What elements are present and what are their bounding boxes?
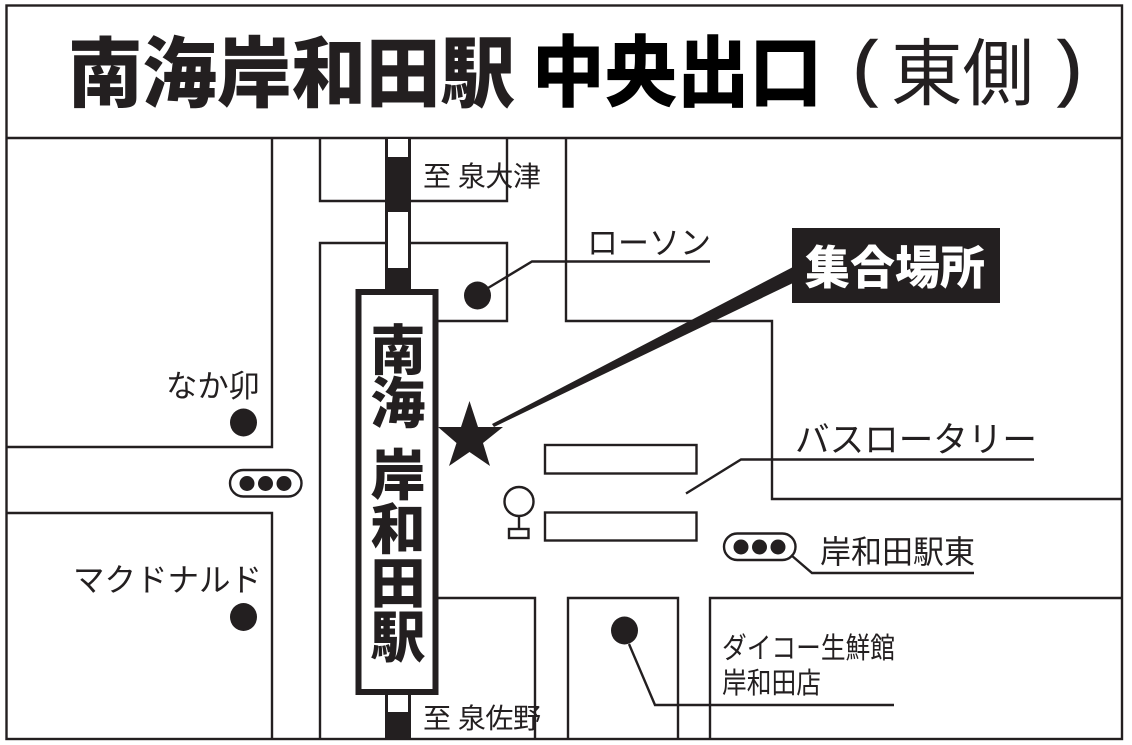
label: bus rotary <box>686 421 1037 494</box>
station name vertical: 南 <box>370 320 426 382</box>
landmark: Daiko fresh foods: 岸和田店 <box>722 668 821 700</box>
station name vertical: 駅 <box>370 607 426 669</box>
landmark: Nakau <box>166 369 260 436</box>
title: central exit: 中央出口 <box>532 29 822 117</box>
station name vertical: 田 <box>370 553 426 615</box>
icon: traffic signal west <box>230 470 302 496</box>
station name vertical <box>370 320 426 669</box>
landmark: McDonald's: マクドナルド <box>73 562 262 598</box>
roads and city blocks <box>6 138 1122 739</box>
icon: traffic signal Kishiwada Station East <box>724 534 796 560</box>
label: to Izumi-Otsu: 至 泉大津 <box>423 161 541 192</box>
title: east side: 東側 <box>891 34 1034 115</box>
meeting point callout <box>492 228 1000 427</box>
title: closing parenthesis: ) <box>1058 28 1082 108</box>
landmark: Nakau: なか卯 <box>166 369 260 404</box>
station name vertical: 和 <box>370 499 426 561</box>
callout label: 集合場所 <box>805 242 985 294</box>
station name vertical: 海 <box>370 373 426 435</box>
landmark: Daiko fresh foods: ダイコー生鮮館 <box>722 632 895 665</box>
label: bus rotary: バスロータリー <box>795 421 1037 460</box>
title <box>68 28 1082 118</box>
icon: meeting point star <box>438 401 503 466</box>
callout label box <box>792 228 1000 303</box>
landmark: McDonald's <box>73 562 262 631</box>
title: station name: 南海岸和田駅 <box>68 32 515 118</box>
label: to Izumi-Sano: 至 泉佐野 <box>423 703 541 734</box>
title: opening parenthesis: ( <box>853 28 877 108</box>
bus rotary islands <box>545 445 696 540</box>
station name vertical: 岸 <box>370 445 426 507</box>
landmark: Lawson <box>464 225 711 310</box>
station building <box>358 292 436 692</box>
railway south of station <box>385 694 411 739</box>
icon: bus stop <box>504 487 534 538</box>
landmark: Lawson: ローソン <box>587 225 711 261</box>
landmark: Daiko fresh foods <box>611 616 895 705</box>
callout pointer <box>492 267 793 427</box>
railway north of station <box>385 138 411 290</box>
label: Kishiwada Station East: 岸和田駅東 <box>820 534 975 570</box>
header divider <box>6 137 1122 139</box>
